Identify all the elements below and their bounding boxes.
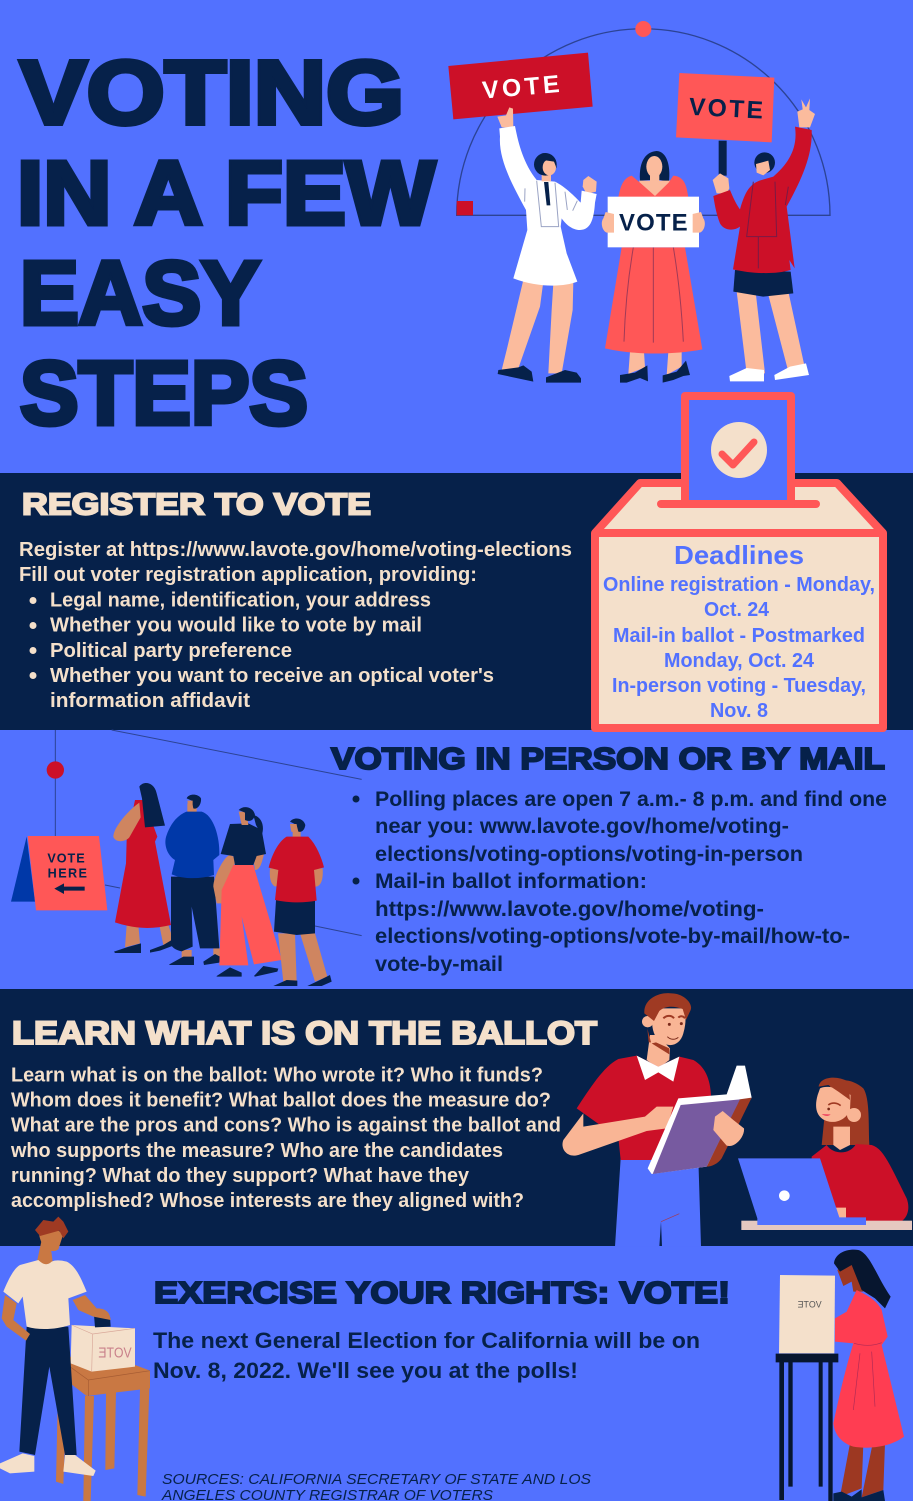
illustration: man reading and woman at laptop <box>562 993 912 1247</box>
sign: vote here: VOTE <box>47 851 85 865</box>
text block: polling and mail-in information: Polling places are open 7 a.m.- 8 p.m. and find one <box>375 788 887 811</box>
text block: ballot questions: accomplished? Whose interests are they aligned with? <box>11 1190 524 1212</box>
heading: register to vote: REGISTER TO VOTE <box>22 487 371 522</box>
text block: deadlines: In-person voting - Tuesday, <box>612 675 866 697</box>
illustration: woman at voting booth <box>776 1250 904 1501</box>
panel: learn what is on the ballot <box>10 1015 598 1212</box>
illustration: three people holding vote signs <box>448 21 830 383</box>
sign: vote here: HERE <box>48 866 87 880</box>
text block: next general election: Nov. 8, 2022. We'll see you at the polls! <box>153 1358 578 1383</box>
text block: deadlines: Nov. 8 <box>710 700 768 722</box>
text block: deadlines: Monday, Oct. 24 <box>664 650 815 672</box>
sign: vote here <box>11 836 107 910</box>
heading: voting in person or by mail: VOTING IN PERSON OR BY MAIL <box>331 741 885 776</box>
illustration: people queueing at vote here sign <box>11 730 362 986</box>
ballot box with deadlines <box>595 396 883 728</box>
illustration: man casting ballot at table: VOTE <box>98 1346 132 1362</box>
figure: woman in coral dress <box>602 151 705 383</box>
figure: man in red shirt <box>269 818 332 986</box>
text block: registration steps: Whether you want to receive an optical voter's <box>50 665 494 687</box>
icon: ballot with check mark <box>685 396 791 504</box>
text block: registration steps: information affidavit <box>50 690 250 712</box>
text block: sources: SOURCES: CALIFORNIA SECRETARY OF STATE AND LOS <box>162 1471 591 1488</box>
figure: man with book <box>562 993 752 1247</box>
text block: deadlines: Online registration - Monday, <box>603 574 875 596</box>
text block: polling and mail-in information: elections/voting-options/voting-in-person <box>375 843 803 866</box>
text block: polling and mail-in information <box>352 788 887 976</box>
text block: ballot questions: running? What do they support? What have they <box>11 1165 470 1187</box>
text block: registration steps: Register at https://www.lavote.gov/home/voting-elections <box>19 539 572 561</box>
text block: next general election <box>153 1328 700 1383</box>
text block: polling and mail-in information: elections/voting-options/vote-by-mail/how-to- <box>375 925 850 948</box>
text block: deadlines: Deadlines <box>674 540 804 570</box>
figure: woman in red dress <box>113 783 175 953</box>
figure: woman in white dress <box>498 126 597 383</box>
title <box>17 44 435 444</box>
text block: ballot questions: Whom does it benefit? What ballot does the measure do? <box>11 1090 551 1112</box>
text block: ballot questions <box>10 1064 561 1212</box>
title: EASY <box>20 244 260 344</box>
sign: red vote sign <box>448 53 593 127</box>
figure: woman in coral trousers <box>213 807 282 977</box>
sign: coral vote sign: VOTE <box>688 94 764 125</box>
illustration: woman at voting booth: VOTE <box>798 1300 822 1310</box>
text block: next general election: The next General Election for California will be on <box>153 1328 700 1353</box>
panel: voting in person or by mail <box>331 741 887 976</box>
text block: ballot questions: who supports the measure? Who are the candidates <box>10 1140 503 1162</box>
text block: sources <box>161 1471 591 1501</box>
text block: polling and mail-in information: vote-by-mail <box>375 953 503 976</box>
panel: register to vote <box>19 487 572 712</box>
illustration: man casting ballot at table <box>0 1217 150 1501</box>
title: VOTING <box>20 44 404 144</box>
title: STEPS <box>20 344 308 444</box>
panel: exercise your rights <box>153 1275 730 1501</box>
figure: person in red shirt <box>713 98 815 381</box>
heading: exercise your rights: EXERCISE YOUR RIGHTS: VOTE! <box>154 1275 730 1310</box>
text block: registration steps: Fill out voter registration application, providing: <box>19 564 477 586</box>
text block: registration steps: Legal name, identification, your address <box>50 590 431 612</box>
text block: polling and mail-in information: near you: www.lavote.gov/home/voting- <box>375 815 789 838</box>
text block: registration steps <box>19 539 572 712</box>
text block: ballot questions: Learn what is on the ballot: Who wrote it? Who it funds? <box>11 1064 543 1086</box>
text block: deadlines: Mail-in ballot - Postmarked <box>613 625 865 647</box>
heading: learn what is on the ballot: LEARN WHAT IS ON THE BALLOT <box>12 1015 598 1051</box>
text block: registration steps: Whether you would like to vote by mail <box>50 614 422 636</box>
sign: white vote sign: VOTE <box>619 210 688 237</box>
text block: polling and mail-in information: Mail-in ballot information: <box>375 870 647 893</box>
sign: coral vote sign <box>676 73 774 142</box>
sign: red vote sign: VOTE <box>481 71 561 105</box>
text block: ballot questions: What are the pros and cons? Who is against the ballot and <box>11 1114 561 1136</box>
text block: deadlines <box>603 540 875 722</box>
figure: man in blue sweater <box>165 795 220 965</box>
title: IN A FEW <box>17 144 435 244</box>
text block: registration steps: Political party preference <box>50 640 292 662</box>
text block: deadlines: Oct. 24 <box>704 599 770 621</box>
figure: woman with laptop <box>738 1078 912 1230</box>
text block: polling and mail-in information: https://www.lavote.gov/home/voting- <box>375 898 764 921</box>
